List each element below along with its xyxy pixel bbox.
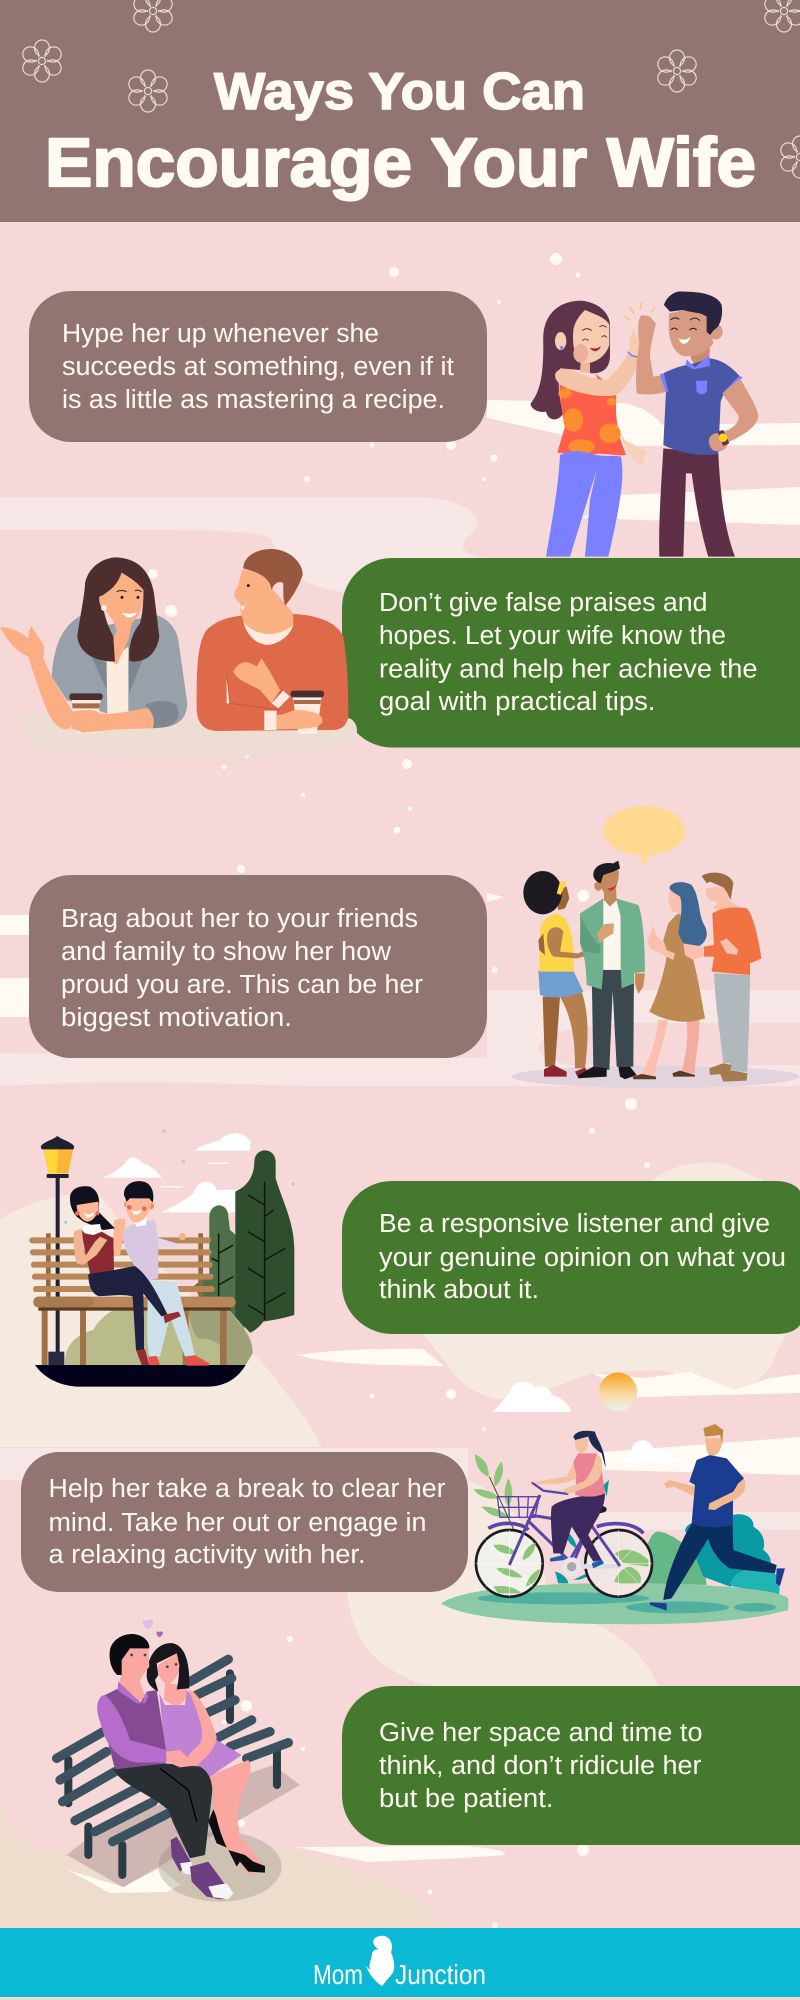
text: brag about her: Brag about her to your friends [61, 905, 418, 933]
panel: take a break [21, 1452, 468, 1592]
illustration: couple talking over coffee [0, 549, 357, 756]
lamp post [41, 1136, 74, 1365]
panel: hype her up [29, 291, 487, 442]
bushes [643, 1510, 780, 1594]
sparkles [64, 1129, 295, 1224]
man [636, 291, 758, 557]
bench [29, 1233, 236, 1365]
panel: responsive listener [342, 1181, 800, 1334]
ground shadow [512, 1065, 800, 1088]
text: responsive listener [379, 1210, 786, 1304]
runner [650, 1424, 785, 1611]
coffee cup [291, 691, 324, 734]
text: false praises [379, 589, 758, 716]
man in green jacket [578, 861, 645, 1079]
title: Ways You Can [214, 63, 585, 121]
hearts [143, 1620, 163, 1637]
man in orange sweater [683, 873, 762, 1082]
floating dots [222, 1637, 293, 1827]
illustration: couple on park bench [29, 1129, 295, 1387]
illustration: sun and cloud [492, 1372, 637, 1412]
man [197, 549, 348, 734]
text: responsive listener: Be a responsive listener and give [379, 1210, 770, 1238]
woman [531, 301, 647, 557]
text: hype her up: succeeds at something, even if it [62, 353, 454, 381]
ground [441, 1583, 788, 1624]
text: take a break: Help her take a break to clear her [48, 1475, 446, 1503]
woman [0, 557, 187, 733]
flower doodles [20, 0, 800, 178]
illustration: cycling and jogging [441, 1424, 788, 1624]
text: brag about her: and family to show her how [61, 938, 392, 966]
text: space and time: Give her space and time to [379, 1719, 702, 1747]
text: false praises: Don’t give false praises and [379, 589, 708, 617]
woman in brown dress [633, 882, 707, 1079]
bushes [65, 1307, 253, 1365]
text: take a break: a relaxing activity with her. [48, 1541, 366, 1569]
text: false praises: reality and help her achieve the [379, 656, 758, 684]
illustration: friends chatting [512, 806, 800, 1088]
header [0, 0, 800, 222]
text: responsive listener: think about it. [379, 1276, 539, 1304]
clouds [101, 1133, 251, 1341]
text: space and time [379, 1719, 702, 1813]
title: Encourage Your Wife [45, 124, 756, 201]
text: false praises: goal with practical tips. [379, 688, 656, 716]
bicycle [476, 1482, 652, 1597]
cyclist [532, 1431, 606, 1568]
panel: brag about her [29, 875, 487, 1058]
footer [0, 1928, 800, 1997]
panel: false praises [342, 558, 800, 748]
ground [35, 1365, 246, 1387]
text: brag about her [61, 905, 424, 1032]
illustration: couple embracing on bench [57, 1620, 300, 1902]
speech bubble [603, 806, 685, 868]
coffee cup [69, 693, 103, 733]
cloud [623, 1440, 682, 1462]
text: space and time: but be patient. [379, 1785, 554, 1813]
text: brag about her: proud you are. This can be her [61, 971, 424, 999]
floating dot [577, 890, 589, 902]
text: hype her up: Hype her up whenever she [62, 320, 379, 348]
text: take a break: mind. Take her out or engage in [48, 1509, 426, 1537]
logo: MomJunction [313, 1936, 486, 1990]
title [45, 63, 756, 201]
text: responsive listener: your genuine opinion on what you [379, 1244, 786, 1272]
table [19, 713, 357, 756]
leaves [473, 1454, 609, 1583]
high-five sparkle [623, 302, 655, 321]
text: space and time: think, and don’t ridicule her [379, 1752, 702, 1780]
man [113, 1181, 209, 1366]
woman in yellow [523, 871, 590, 1078]
man [97, 1634, 233, 1899]
text: false praises: hopes. Let your wife know the [379, 622, 726, 650]
text: hype her up: is as little as mastering a recipe. [62, 386, 445, 414]
bench [57, 1659, 288, 1875]
text: brag about her: biggest motivation. [61, 1004, 292, 1032]
background shapes [0, 400, 800, 2000]
illustration: high-five couple [531, 291, 758, 557]
text: hype her up [62, 320, 454, 414]
shadows [67, 1765, 300, 1902]
text: take a break [48, 1475, 446, 1569]
panel: space and time [342, 1686, 800, 1845]
logo: MomJunction: Junction [395, 1959, 486, 1990]
woman [70, 1186, 181, 1365]
woman [147, 1643, 265, 1873]
trees [193, 1150, 294, 1333]
logo: MomJunction: Mom [313, 1959, 363, 1990]
decorative dots [148, 253, 650, 1928]
